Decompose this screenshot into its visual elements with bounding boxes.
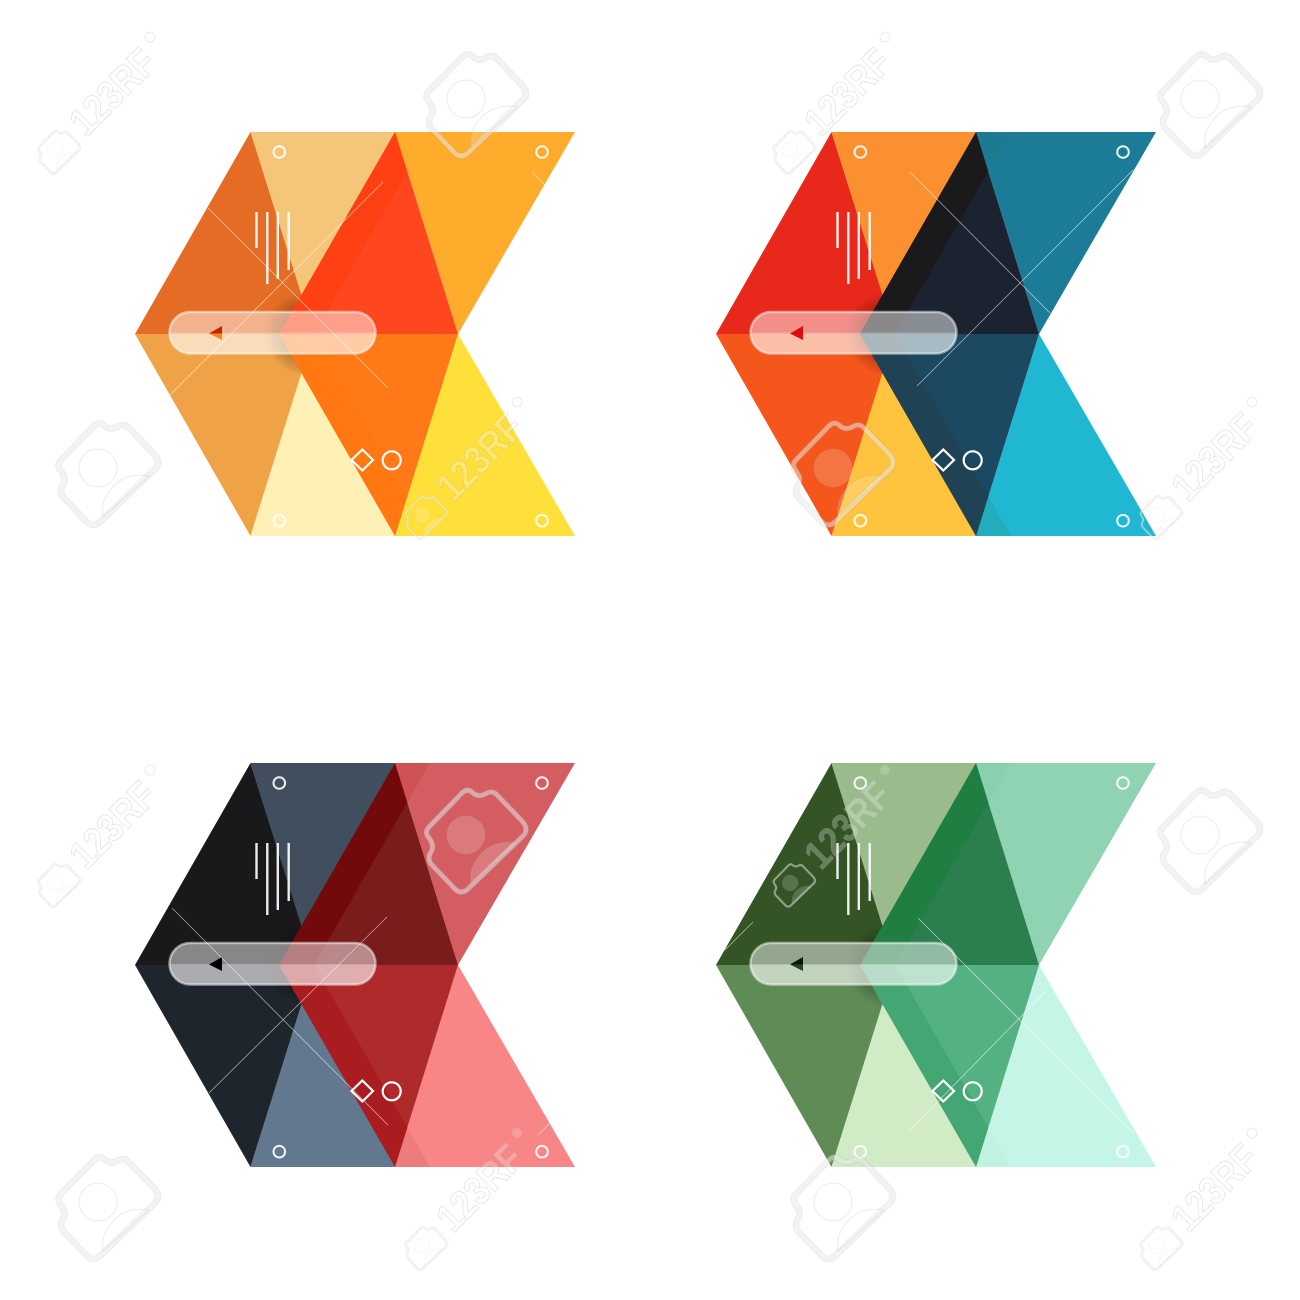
watermark: 123RF logo bottom centre xyxy=(406,1128,532,1270)
vertical lines xyxy=(256,843,289,915)
top and bottom light triangles xyxy=(250,132,395,536)
top and bottom light triangles xyxy=(832,132,976,536)
watermark: 123RF logo centre upper left xyxy=(406,397,532,539)
left triangles xyxy=(135,132,314,536)
panel: black and crimson arrow xyxy=(135,763,575,1167)
vertical lines xyxy=(838,843,870,915)
watermark: 123RF logo centre upper left: 123RF xyxy=(428,405,532,509)
watermark: 123RF logo top left xyxy=(39,32,165,174)
diamond and circle markers xyxy=(932,450,982,470)
centre triangles xyxy=(860,763,1039,1167)
glass pill with arrow marker xyxy=(170,943,376,984)
left triangles xyxy=(716,132,895,536)
centre triangles xyxy=(279,132,458,536)
right triangles xyxy=(976,132,1156,536)
vertical lines xyxy=(838,212,870,284)
right triangles xyxy=(395,763,575,1167)
panel: red and teal arrow xyxy=(716,132,1156,536)
diamond and circle markers xyxy=(352,450,401,470)
right triangles xyxy=(976,763,1156,1167)
top and bottom light triangles xyxy=(832,763,976,1167)
top and bottom light triangles xyxy=(250,763,395,1167)
watermark: 123RF logo bottom right: 123RF xyxy=(1163,1136,1267,1240)
centre triangles xyxy=(279,763,458,1167)
glass pill with arrow marker xyxy=(750,312,956,354)
watermark: 123RF logo top left: 123RF xyxy=(61,40,165,144)
vertical lines xyxy=(256,212,289,284)
watermark: 123RF logo centre upper right xyxy=(1141,397,1267,539)
left triangles xyxy=(135,763,314,1167)
watermark: 123RF logo bottom right xyxy=(1141,1128,1267,1270)
diamond and circle markers xyxy=(932,1080,982,1102)
diamond and circle markers xyxy=(352,1080,401,1102)
watermark: 123RF logo lower right: 123RF xyxy=(796,773,900,877)
panel: green arrow xyxy=(716,763,1156,1167)
panel: orange and yellow arrow xyxy=(135,132,575,536)
watermark: 123RF logo lower left: 123RF xyxy=(61,773,165,877)
glass pill with arrow marker xyxy=(750,943,956,984)
watermark: 123RF logo centre upper right: 123RF xyxy=(1163,405,1267,509)
corner dots xyxy=(274,777,548,1158)
glass pill with arrow marker xyxy=(170,312,376,354)
watermark: 123RF logo lower right xyxy=(774,765,900,907)
watermark: 123RF logo lower left xyxy=(39,765,165,907)
watermark: 123RF logo top right xyxy=(774,32,900,174)
corner dots xyxy=(274,146,548,526)
right triangles xyxy=(395,132,575,536)
watermark: 123RF logo top right: 123RF xyxy=(796,40,900,144)
corner dots xyxy=(854,146,1129,526)
centre triangles xyxy=(860,132,1039,536)
watermark: 123RF logo bottom centre: 123RF xyxy=(428,1136,532,1240)
corner dots xyxy=(854,777,1129,1158)
left triangles xyxy=(716,763,895,1167)
